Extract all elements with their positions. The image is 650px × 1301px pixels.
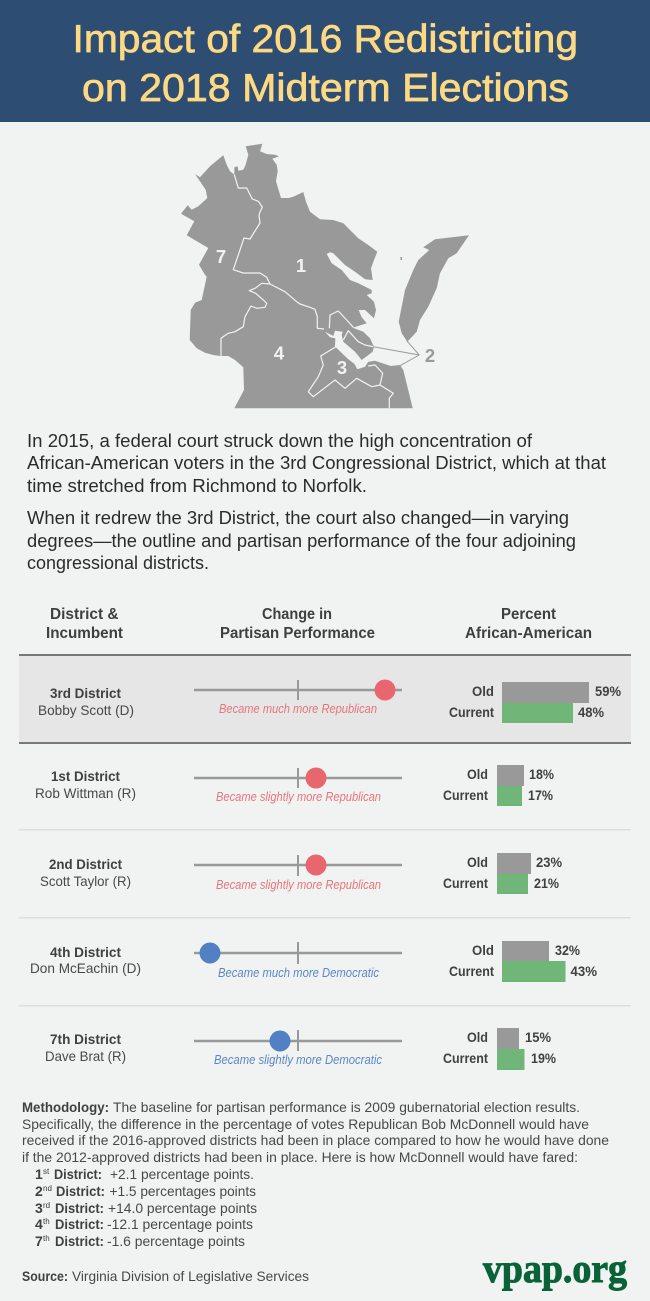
incumbent: Don McEachin [30, 944, 141, 976]
bars: 23% old, 21% current: Current [443, 875, 488, 891]
vpap.org logo: vpap.org [483, 1246, 627, 1291]
header banner [0, 0, 650, 122]
intro paragraph 2: congressional districts. [27, 552, 209, 573]
source line: Virginia Division of Legislative Services [72, 1268, 309, 1284]
incumbent: Dave Brat: Dave Brat (R) [45, 1048, 126, 1064]
district results list: District: [55, 1233, 104, 1249]
column heading: change in partisan performance [220, 606, 375, 642]
column heading: percent African-American: Percent [501, 606, 557, 623]
intro paragraph 1: African-American voters in the 3rd Congressional District, which at that [27, 452, 606, 473]
intro paragraph 2: When it redrew the 3rd District, the court also changed—in varying [27, 507, 569, 528]
row: 1st District [19, 765, 631, 830]
district results list: 3 [35, 1200, 43, 1216]
incumbent: Dave Brat [45, 1031, 126, 1064]
title: Impact of 2016 Redistricting [72, 18, 578, 61]
title: on 2018 Midterm Elections [82, 67, 569, 110]
row: 3rd District [19, 654, 631, 744]
district results list: District: [55, 1200, 104, 1216]
district results list: +14.0 percentage points [108, 1200, 257, 1216]
bars: 59% old, 48% current: Current [449, 704, 494, 720]
map label 7: 7 [216, 246, 226, 267]
partisan scale: slightly more Republican: Became slightly more Republican [216, 877, 381, 892]
partisan scale: slightly more Republican [194, 854, 402, 892]
district results list [35, 1166, 257, 1249]
district results list: 1 [35, 1166, 43, 1182]
column heading: change in partisan performance: Partisan Performance [220, 625, 375, 642]
district results list: 7 [35, 1233, 43, 1249]
bars: 15% old, 19% current [443, 1028, 556, 1070]
column heading: district and incumbent: District & [50, 606, 119, 623]
column heading: change in partisan performance: Change in [262, 606, 332, 623]
map: small island [400, 257, 402, 260]
bars: 18% old, 17% current [443, 765, 554, 806]
bars: 15% old, 19% current: Old [467, 1029, 488, 1045]
partisan scale: much more Democratic: Became much more Democratic [218, 965, 379, 980]
bars: 15% old, 19% current: 15% [525, 1029, 552, 1045]
incumbent: Don McEachin: 4th District [50, 944, 121, 960]
column heading: district and incumbent: Incumbent [46, 625, 124, 642]
bars: 23% old, 21% current: 21% [534, 875, 559, 891]
row: 7th District [45, 1028, 556, 1070]
intro paragraph 1: time stretched from Richmond to Norfolk. [27, 475, 367, 496]
partisan scale: slightly more Democratic [194, 1030, 402, 1067]
methodology note: Methodology: [22, 1099, 109, 1115]
bars: 32% old, 43% current [449, 941, 598, 982]
partisan scale: much more Republican: Became much more Republican [219, 701, 377, 716]
intro paragraph 2 [27, 507, 576, 573]
district results list: +1.5 percentages points [110, 1183, 256, 1199]
map label 1: 1 [296, 255, 306, 276]
bars: 18% old, 17% current: 18% [529, 766, 554, 782]
bars: 18% old, 17% current: Current [443, 787, 488, 803]
incumbent: Rob Wittman: 1st District [51, 768, 120, 784]
methodology note: Specifically, the difference in the percentage of votes Republican Bob McDonnell would have [22, 1116, 589, 1132]
bars: 23% old, 21% current [443, 853, 563, 894]
district results list: -12.1 percentage points [107, 1216, 253, 1232]
map: district boundaries [221, 175, 393, 408]
district results list: District: [56, 1183, 105, 1199]
district results list: rd [43, 1201, 50, 1210]
intro paragraph 2: degrees—the outline and partisan performance of the four adjoining [27, 530, 576, 551]
source line: Source: [22, 1268, 68, 1284]
incumbent: Rob Wittman: Rob Wittman (R) [35, 785, 136, 801]
district results list: 2 [35, 1183, 43, 1199]
district results list: District: [54, 1166, 102, 1182]
incumbent: Bobby Scott: 3rd District [50, 685, 121, 701]
partisan scale: slightly more Republican [194, 768, 402, 804]
methodology note: received if the 2016-approved districts had been in place compared to how he would have done [22, 1132, 609, 1148]
district results list: th [43, 1217, 50, 1226]
bars: 32% old, 43% current: 32% [555, 942, 580, 958]
district results list: -1.6 percentage points [107, 1233, 245, 1249]
bars: 18% old, 17% current: Old [467, 766, 488, 782]
incumbent: Dave Brat: 7th District [50, 1031, 121, 1047]
bars: 23% old, 21% current: 23% [536, 854, 563, 870]
district results list: +2.1 percentage points. [110, 1166, 254, 1182]
row: 4th District [19, 941, 631, 1006]
map label 2: 2 [425, 345, 435, 366]
row: 2nd District [19, 853, 631, 918]
incumbent: Don McEachin: Don McEachin (D) [30, 960, 141, 976]
incumbent: Scott Taylor: Scott Taylor (R) [40, 873, 131, 889]
methodology note: if the 2012-approved districts had been in place. Here is how McDonnell would have fared: [22, 1149, 578, 1165]
partisan scale: much more Democratic [194, 942, 402, 980]
map land: mainland districts [181, 144, 413, 408]
incumbent: Bobby Scott: Bobby Scott (D) [38, 702, 134, 718]
map land: eastern shore [399, 235, 469, 342]
map: leader lines to district 2 [373, 341, 419, 366]
bars: 18% old, 17% current: 17% [528, 787, 553, 803]
district results list: th [43, 1234, 50, 1243]
bars: 23% old, 21% current: Old [467, 854, 488, 870]
district results list: 4 [35, 1216, 43, 1232]
methodology note: The baseline for partisan performance is 2009 gubernatorial election results. [113, 1099, 580, 1115]
intro paragraph 1: In 2015, a federal court struck down the high concentration of [27, 430, 533, 451]
map: Virginia congressional districts [181, 144, 469, 408]
bars: 15% old, 19% current: 19% [531, 1050, 556, 1066]
column heading: percent African-American: African-American [465, 625, 592, 642]
incumbent: Bobby Scott [38, 685, 134, 718]
bars: 32% old, 43% current: Current [449, 963, 494, 979]
bars: 32% old, 43% current: 43% [570, 963, 598, 979]
incumbent: Scott Taylor [40, 856, 131, 889]
district results list: District: [55, 1216, 104, 1232]
intro paragraph 1 [27, 430, 606, 496]
partisan scale: much more Republican [194, 680, 402, 716]
district results list: nd [43, 1184, 52, 1193]
bars: 15% old, 19% current: Current [443, 1050, 488, 1066]
partisan scale: slightly more Republican: Became slightly more Republican [216, 789, 381, 804]
bars: 59% old, 48% current: Old [472, 683, 494, 699]
bars: 32% old, 43% current: Old [472, 942, 494, 958]
column heading: percent African-American [465, 606, 592, 642]
title [72, 18, 578, 110]
incumbent: Rob Wittman [35, 768, 136, 801]
map label 4: 4 [274, 342, 285, 364]
incumbent: Scott Taylor: 2nd District [49, 856, 122, 872]
methodology note [22, 1099, 609, 1165]
partisan scale: slightly more Democratic: Became slightly more Democratic [214, 1052, 382, 1067]
bars: 59% old, 48% current: 59% [595, 683, 622, 699]
bars: 59% old, 48% current: 48% [578, 704, 605, 720]
map label 3: 3 [337, 357, 347, 378]
district results list: st [43, 1167, 50, 1176]
column heading: district and incumbent [46, 606, 124, 642]
bars: 59% old, 48% current [449, 682, 622, 723]
